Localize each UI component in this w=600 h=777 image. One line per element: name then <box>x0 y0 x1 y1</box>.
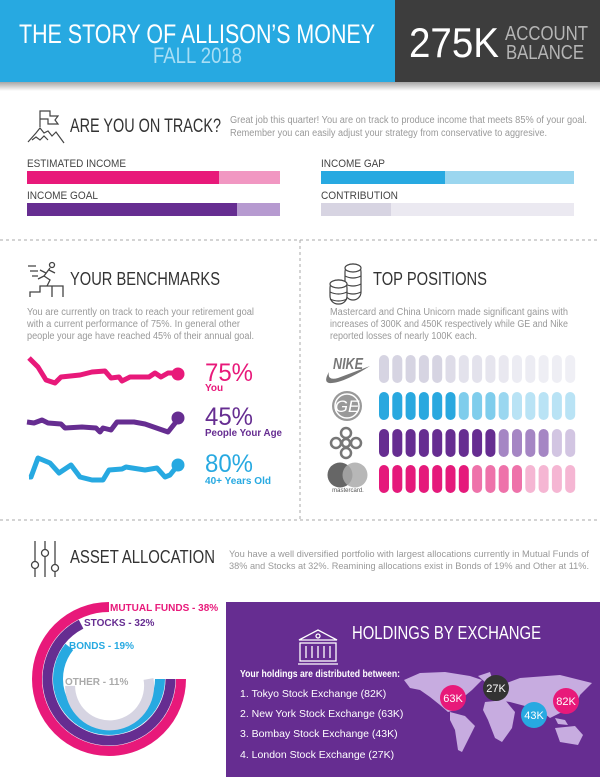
heading: YOUR BENCHMARKS <box>70 269 220 289</box>
radial bar chart <box>37 603 218 751</box>
text: 38% and Stocks at 32%. Reamining allocations exist in Bonds of 19% and Other at 11%. <box>229 561 589 572</box>
account balance: 275K <box>409 19 499 66</box>
logo: nike: NIKE <box>333 356 364 373</box>
bar: income goal: INCOME GOAL <box>27 190 98 202</box>
radial bar chart: STOCKS - 32% <box>84 618 154 629</box>
panel: benchmarks <box>26 262 282 487</box>
subtitle: FALL 2018 <box>153 43 242 68</box>
list: 1. Tokyo Stock Exchange (82K) <box>240 688 386 700</box>
bar: estimated income <box>27 158 280 184</box>
bubbles: 43K <box>524 710 544 722</box>
heading: TOP POSITIONS <box>373 269 487 289</box>
bar: income gap: INCOME GAP <box>321 158 385 170</box>
map <box>404 672 592 752</box>
line chart: you: 75% <box>205 359 253 387</box>
icon: bank <box>298 630 338 664</box>
text: with a current performance of 75%. In general other <box>26 319 241 330</box>
bubbles <box>440 675 579 728</box>
bar: estimated income: ESTIMATED INCOME <box>27 158 126 170</box>
line chart: 40+ <box>29 450 271 487</box>
bar: contribution: CONTRIBUTION <box>321 190 398 202</box>
list <box>240 668 403 761</box>
text: You are currently on track to reach your retirement goal <box>27 307 254 318</box>
list: 2. New York Stock Exchange (63K) <box>240 708 403 720</box>
list: 3. Bombay Stock Exchange (43K) <box>240 728 398 740</box>
bar: income goal <box>27 190 280 216</box>
line chart: people your age <box>27 403 282 439</box>
line chart: 40+: 40+ Years Old <box>205 476 271 487</box>
logo: nike <box>326 356 370 383</box>
line chart: you: You <box>205 383 223 394</box>
icon: flag mountain <box>28 111 64 143</box>
panel: asset allocation <box>32 541 589 751</box>
radial bar chart: OTHER - 11% <box>65 677 128 688</box>
text <box>26 307 254 342</box>
logo: china unicom <box>331 428 361 458</box>
bubbles: 63K <box>443 693 463 705</box>
logo: mastercard: mastercard. <box>332 488 364 494</box>
bubbles: 82K <box>556 696 576 708</box>
bar: contribution <box>321 190 574 216</box>
line chart: you <box>29 358 253 394</box>
radial bar chart: BONDS - 19% <box>69 641 134 652</box>
icon: sliders <box>32 541 58 577</box>
panel: on track <box>27 111 587 216</box>
text: Mastercard and China Unicorn made significant gains with <box>330 307 568 318</box>
line chart: people your age: 45% <box>205 403 253 431</box>
text <box>330 307 568 342</box>
text <box>229 549 589 572</box>
text: You have a well diversified portfolio with largest allocations currently in Mutual Funds of <box>229 549 589 560</box>
text: people your age have reached 45% of their annual goal. <box>27 331 254 342</box>
logo: mastercard <box>328 462 368 494</box>
list: Your holdings are distributed between: <box>240 668 400 680</box>
account balance: BALANCE <box>506 42 584 64</box>
line chart: people your age: People Your Age <box>205 428 282 439</box>
heading: ASSET ALLOCATION <box>70 547 215 567</box>
account balance <box>409 19 588 66</box>
text <box>230 115 587 139</box>
icon: runner stairs <box>28 262 63 297</box>
pill chart <box>379 355 575 493</box>
text: increases of 300K and 450K respectively while GE and Nike <box>330 319 568 330</box>
icon: coins <box>330 264 361 304</box>
heading: HOLDINGS BY EXCHANGE <box>352 623 541 643</box>
logo: ge <box>332 391 362 421</box>
heading: ARE YOU ON TRACK? <box>70 116 221 137</box>
bar: income gap <box>321 158 574 184</box>
line chart: 40+: 80% <box>205 450 253 478</box>
title: THE STORY OF ALLISON’S MONEY <box>19 19 375 49</box>
header <box>0 0 600 91</box>
logo: ge: GE <box>335 397 360 416</box>
text: Remember you can easily adjust your strategy from conservative to aggresive. <box>230 128 547 139</box>
list: 4. London Stock Exchange (27K) <box>240 749 394 761</box>
bubbles: 27K <box>486 683 506 695</box>
radial bar chart: MUTUAL FUNDS - 38% <box>110 603 218 614</box>
text: reported losses of nearly 100K each. <box>330 331 477 342</box>
panel: top positions <box>326 264 575 494</box>
panel: holdings by exchange <box>226 602 600 777</box>
